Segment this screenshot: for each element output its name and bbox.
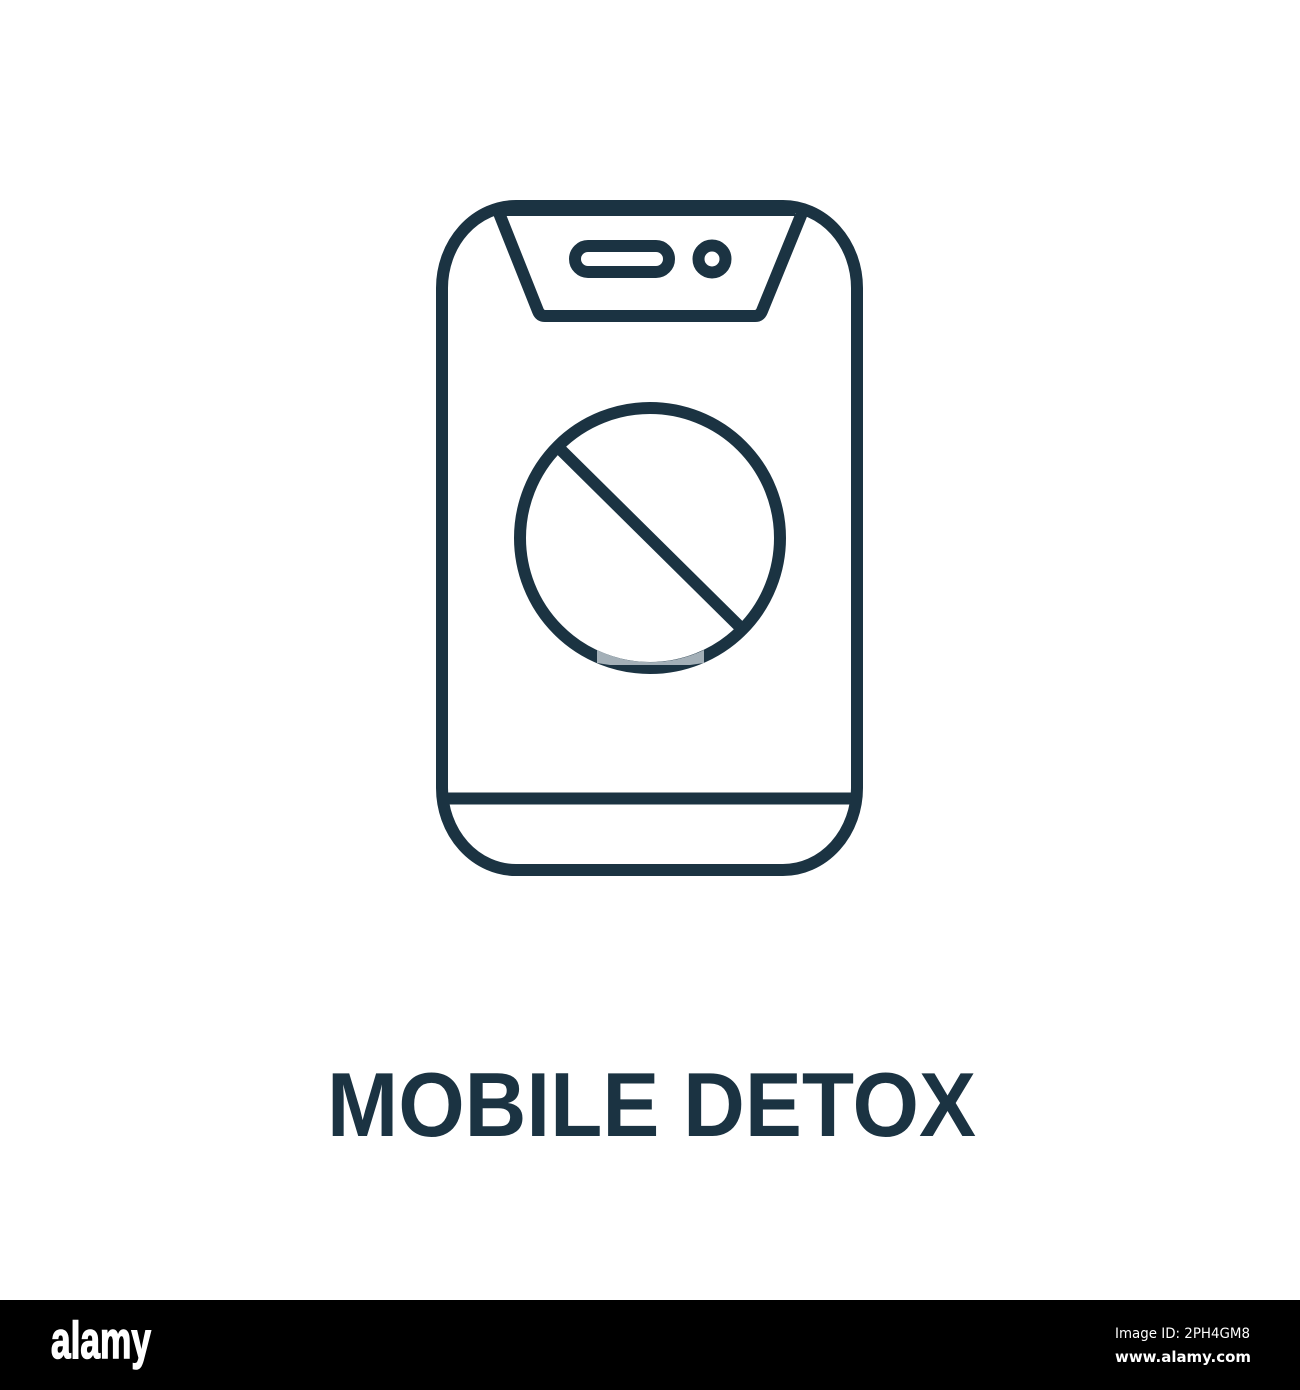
title: MOBILE DETOX — [327, 1055, 976, 1156]
image id: Image ID: 2PH4GM8 — [1115, 1326, 1250, 1342]
notch camera — [698, 246, 726, 272]
icon: phone with prohibition sign — [442, 206, 857, 870]
notch speaker — [575, 246, 669, 272]
prohibition sign — [520, 408, 780, 668]
footer bar — [0, 1300, 1300, 1390]
phone body — [442, 206, 857, 870]
phone bottom bar — [442, 792, 857, 804]
phone notch — [499, 213, 802, 316]
watermark on ring — [597, 650, 704, 665]
phone top band — [505, 205, 795, 216]
website: www.alamy.com — [1115, 1348, 1251, 1366]
alamy logo: alamy — [51, 1312, 151, 1370]
